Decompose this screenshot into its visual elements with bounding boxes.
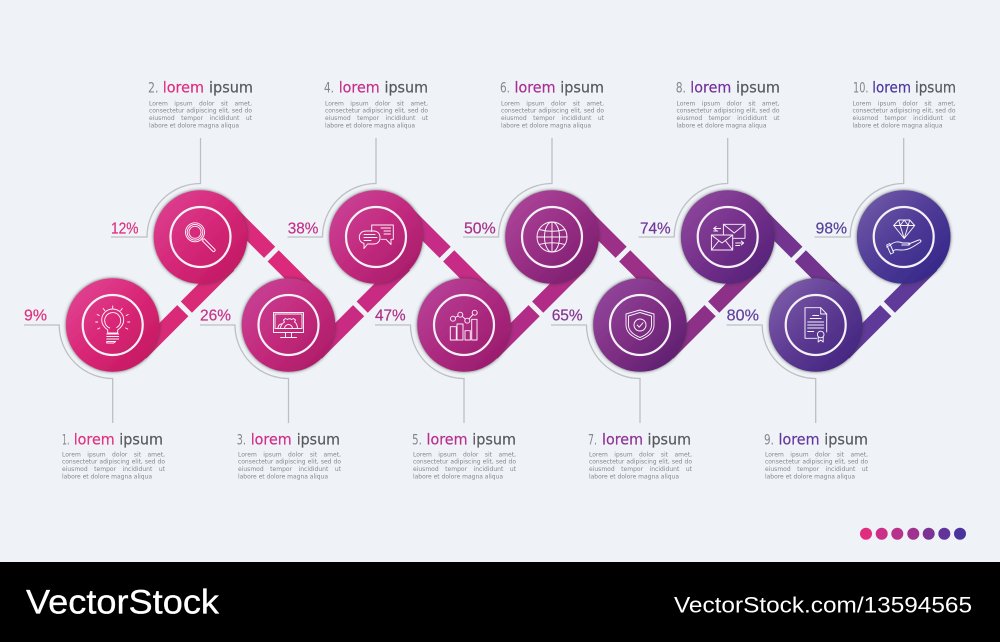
text block 1: labore et dolore magna aliqua [62, 473, 152, 480]
text block 3: lorem [251, 430, 292, 448]
percentage labels [24, 220, 847, 325]
text block 4: 4. [324, 81, 334, 97]
text block 1: lorem [74, 430, 115, 448]
step 10 node: diamond in hand [857, 190, 950, 284]
text block 2: eiusmod tempor incididunt ut [149, 115, 253, 122]
step 4 node: chat bubbles [329, 190, 423, 284]
text block 10: 10. [853, 81, 868, 97]
text block 3 [237, 430, 342, 480]
text block 4 [324, 79, 429, 129]
text block 7: lorem [602, 430, 643, 448]
text block 2: lorem [163, 79, 204, 97]
text block 5: labore et dolore magna aliqua [413, 473, 503, 480]
percentage labels: 38% [288, 220, 319, 237]
text block 8: 8. [676, 81, 686, 97]
text block 3: consectetur adipiscing elit, sed do [238, 459, 341, 466]
text block 3: labore et dolore magna aliqua [238, 473, 328, 480]
text block 6: Lorem ipsum dolor sit amet, [501, 100, 604, 107]
step 9 node: certificate document [769, 278, 862, 372]
text block 8: eiusmod tempor incididunt ut [676, 115, 780, 122]
text block 10: ipsum [915, 79, 956, 97]
text block 1: ipsum [119, 430, 163, 448]
text block 7: ipsum [648, 430, 691, 448]
text block 8: labore et dolore magna aliqua [676, 122, 767, 129]
text block 2 [148, 79, 253, 129]
footer url: VectorStock.com/13594565 [674, 592, 972, 618]
text block 2: labore et dolore magna aliqua [149, 122, 239, 129]
text block 4: eiusmod tempor incididunt ut [325, 115, 429, 122]
text block 7: consectetur adipiscing elit, sed do [589, 459, 692, 466]
text block 3: ipsum [297, 430, 340, 448]
percentage labels: 47% [375, 308, 406, 325]
text block 4: Lorem ipsum dolor sit amet, [325, 100, 428, 107]
text block 9: Lorem ipsum dolor sit amet, [765, 451, 868, 458]
step 5 node: bar chart [417, 278, 511, 372]
text block 8: ipsum [736, 79, 780, 97]
text block 5: Lorem ipsum dolor sit amet, [413, 451, 516, 458]
text block 7: labore et dolore magna aliqua [589, 473, 679, 480]
step 8 node: envelopes [681, 190, 774, 284]
text block 9 [764, 430, 869, 480]
connector bands [141, 210, 932, 353]
percentage labels: 74% [640, 220, 671, 237]
text block 7: 7. [588, 432, 597, 448]
text block 5: eiusmod tempor incididunt ut [413, 466, 517, 473]
text block 5: consectetur adipiscing elit, sed do [413, 459, 516, 466]
step 3 node: monitor with gears [242, 278, 335, 372]
text block 4: consectetur adipiscing elit, sed do [325, 108, 428, 115]
text block 1: consectetur adipiscing elit, sed do [62, 459, 165, 466]
text block 6: ipsum [560, 79, 604, 97]
text block 3: 3. [237, 432, 246, 448]
text block 3: eiusmod tempor incididunt ut [238, 466, 342, 473]
footer logo: VectorStock [26, 583, 220, 621]
percentage labels: 50% [464, 220, 496, 237]
text block 4: labore et dolore magna aliqua [325, 122, 415, 129]
percentage labels: 65% [552, 308, 583, 325]
percentage labels: 9% [24, 308, 47, 325]
text block 9: consectetur adipiscing elit, sed do [765, 459, 868, 466]
callout lines [24, 138, 904, 423]
text block 7 [588, 430, 693, 480]
footer bar [0, 562, 1000, 642]
text block 3: Lorem ipsum dolor sit amet, [238, 451, 341, 458]
text block 5: lorem [426, 430, 468, 448]
text block 10: lorem [872, 79, 911, 97]
text block 8: consectetur adipiscing elit, sed do [676, 108, 780, 115]
step 2 node: magnifier [154, 190, 247, 284]
text block 6 [500, 79, 605, 129]
text block 6: lorem [514, 79, 556, 97]
palette dots [860, 528, 966, 540]
percentage labels: 26% [200, 308, 231, 325]
text block 9: labore et dolore magna aliqua [765, 473, 855, 480]
text block 9: eiusmod tempor incididunt ut [765, 466, 869, 473]
text block 9: ipsum [824, 430, 868, 448]
text block 2: consectetur adipiscing elit, sed do [149, 108, 252, 115]
text block 4: lorem [339, 79, 380, 97]
text block 1: 1. [62, 432, 70, 448]
text block 8 [676, 79, 780, 129]
text block 1: Lorem ipsum dolor sit amet, [62, 451, 165, 458]
text block 5: ipsum [472, 430, 516, 448]
text block 7: Lorem ipsum dolor sit amet, [589, 451, 692, 458]
text block 10 [852, 79, 956, 129]
text block 4: ipsum [384, 79, 428, 97]
text block 10: labore et dolore magna aliqua [852, 122, 943, 129]
text block 6: labore et dolore magna aliqua [501, 122, 591, 129]
step 6 node: globe [505, 190, 599, 284]
percentage labels: 98% [816, 220, 847, 237]
text block 2: Lorem ipsum dolor sit amet, [149, 100, 252, 107]
percentage labels: 80% [727, 308, 759, 325]
text block 8: Lorem ipsum dolor sit amet, [676, 100, 780, 107]
text block 10: Lorem ipsum dolor sit amet, [852, 100, 956, 107]
text block 1 [62, 430, 166, 480]
text block 5 [412, 430, 517, 480]
text block 9: 9. [764, 432, 774, 448]
text block 8: lorem [690, 79, 731, 97]
step 1 node: light bulb [66, 278, 160, 372]
text block 6: consectetur adipiscing elit, sed do [501, 108, 604, 115]
text block 5: 5. [412, 432, 422, 448]
percentage labels: 12% [111, 220, 139, 237]
text block 2: 2. [148, 81, 158, 97]
text block 6: 6. [500, 81, 510, 97]
text block 7: eiusmod tempor incididunt ut [589, 466, 693, 473]
text block 9: lorem [778, 430, 820, 448]
step 7 node: shield [593, 278, 687, 372]
text block 2: ipsum [209, 79, 253, 97]
text block 10: consectetur adipiscing elit, sed do [852, 108, 956, 115]
text block 10: eiusmod tempor incididunt ut [852, 115, 956, 122]
text block 6: eiusmod tempor incididunt ut [501, 115, 605, 122]
text block 1: eiusmod tempor incididunt ut [62, 466, 166, 473]
